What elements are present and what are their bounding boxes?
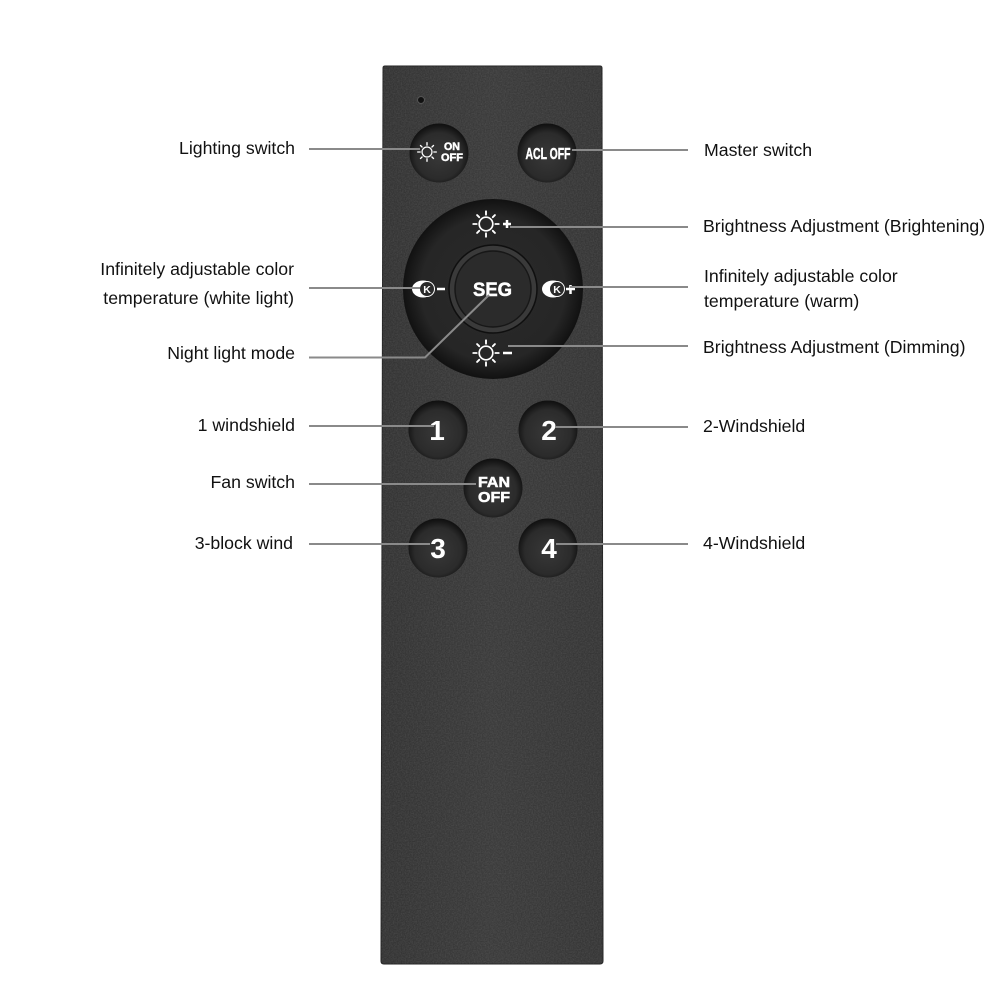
label: night light mode: Night light mode	[167, 343, 295, 363]
label: master switch: Master switch	[704, 140, 812, 160]
button: fan off	[464, 458, 522, 518]
label: 2-windshield: 2-Windshield	[703, 416, 805, 436]
button: SEG: SEG	[473, 280, 512, 301]
icon: colour temperature plus: K	[553, 284, 561, 296]
button: fan off: OFF	[478, 490, 510, 506]
label: brightness down: Brightness Adjustment (Dimming)	[703, 337, 965, 357]
control wheel	[403, 199, 583, 379]
label: 1 windshield: 1 windshield	[198, 415, 295, 435]
remote control body	[381, 66, 603, 964]
indicator light	[418, 96, 424, 104]
label: white light colour temperature	[100, 259, 420, 308]
button: master switch ACL OFF	[518, 124, 576, 182]
label: warm colour temperature	[570, 266, 898, 311]
icon: brightness down	[473, 340, 512, 366]
label: warm colour temperature: temperature (warm)	[704, 291, 859, 311]
button: SEG	[449, 245, 537, 333]
label: night light mode	[167, 295, 489, 363]
button: 4: 4	[541, 533, 557, 564]
button: lighting on/off: ON	[444, 141, 460, 153]
label: lighting switch: Lighting switch	[179, 138, 295, 158]
label: white light colour temperature: Infinitely adjustable color	[100, 259, 294, 279]
label: white light colour temperature: temperature (white light)	[103, 288, 294, 308]
button: 1: 1	[429, 415, 445, 446]
button: lighting on/off: OFF	[441, 152, 463, 164]
button: 2: 2	[541, 415, 557, 446]
icon: colour temperature minus	[412, 280, 445, 298]
icon: brightness up	[473, 211, 511, 237]
label: brightness up: Brightness Adjustment (Brightening)	[703, 216, 985, 236]
label: 3-block wind: 3-block wind	[195, 533, 293, 553]
label: 4-windshield: 4-Windshield	[703, 533, 805, 553]
button: lighting on/off	[410, 124, 468, 182]
icon: colour temperature plus	[542, 280, 575, 298]
button: 3: 3	[430, 533, 446, 564]
label: warm colour temperature: Infinitely adjustable color	[704, 266, 898, 286]
button: master switch ACL OFF: ACL OFF	[526, 146, 571, 163]
label: fan switch: Fan switch	[210, 472, 295, 492]
button: 2	[518, 400, 578, 460]
button: fan off: FAN	[478, 475, 510, 491]
button: 3	[408, 518, 468, 578]
button: 1	[408, 400, 468, 460]
icon: colour temperature minus: K	[423, 284, 431, 296]
button: 4	[518, 518, 578, 578]
